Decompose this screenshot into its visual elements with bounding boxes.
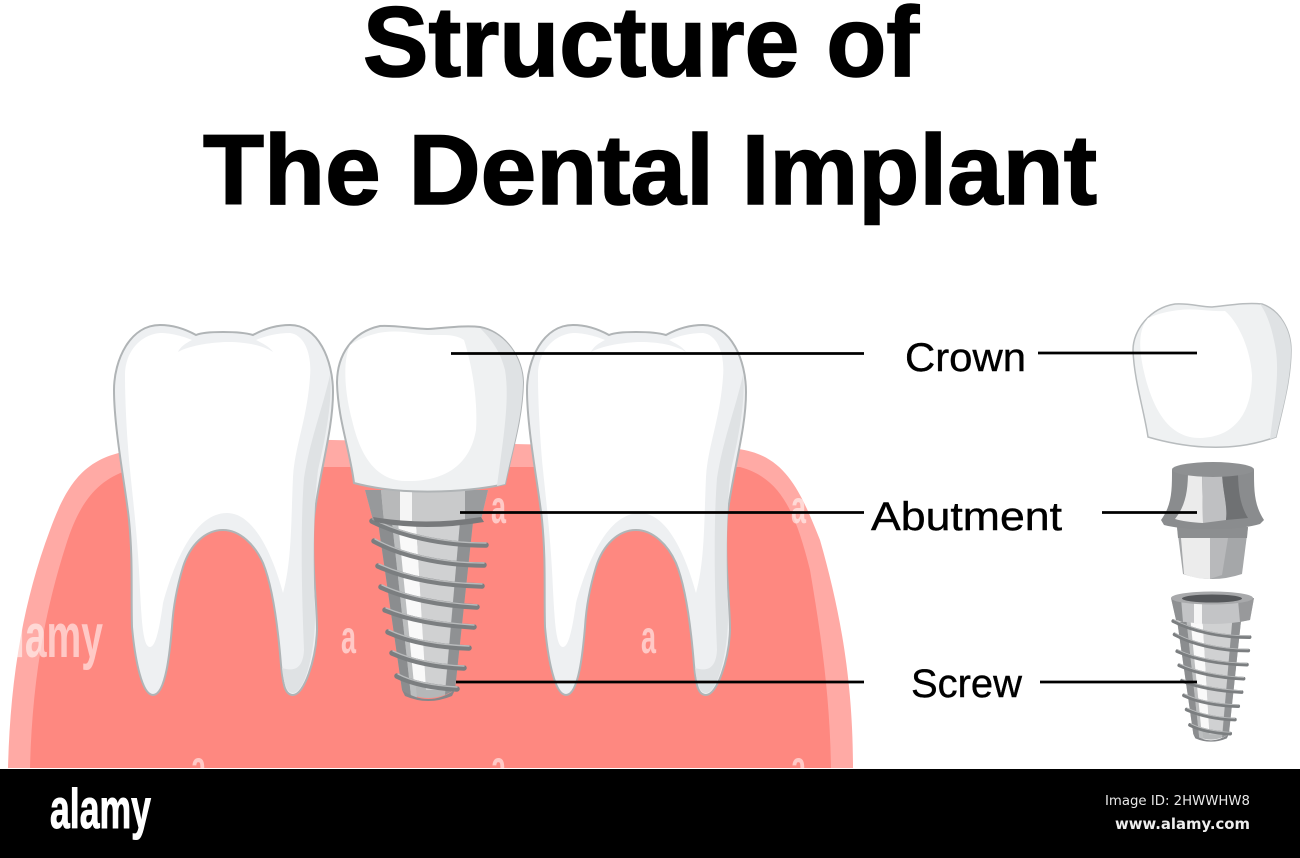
watermark: [14, 481, 806, 793]
watermark: a: [791, 741, 806, 793]
watermark: a: [641, 611, 656, 663]
part: abutment: [1161, 462, 1264, 579]
left tooth: [114, 325, 333, 695]
footer logo: alamy: [50, 777, 151, 840]
image id: Image ID: 2HWWHW8: [1105, 793, 1250, 809]
implant: abutment collar: [365, 490, 488, 527]
watermark: a: [491, 741, 506, 793]
implant: screw: [372, 519, 486, 701]
leader lines: [451, 353, 1197, 682]
title: [203, 0, 1097, 225]
watermark: lamy: [14, 602, 103, 671]
gum: [8, 438, 853, 768]
implant crown: [337, 326, 523, 492]
label: abutment: Abutment: [871, 495, 1062, 539]
watermark: a: [491, 481, 506, 533]
watermark: a: [191, 741, 206, 793]
title: The Dental Implant: [203, 114, 1097, 225]
right tooth: [527, 325, 746, 695]
watermark: a: [791, 481, 806, 533]
website: www.alamy.com: [1115, 815, 1250, 833]
label: screw: Screw: [911, 662, 1022, 706]
watermark: a: [341, 611, 356, 663]
footer bar: [0, 769, 1300, 858]
part: crown: [1133, 303, 1291, 447]
label: crown: Crown: [905, 336, 1026, 380]
part: screw: [1171, 592, 1254, 742]
